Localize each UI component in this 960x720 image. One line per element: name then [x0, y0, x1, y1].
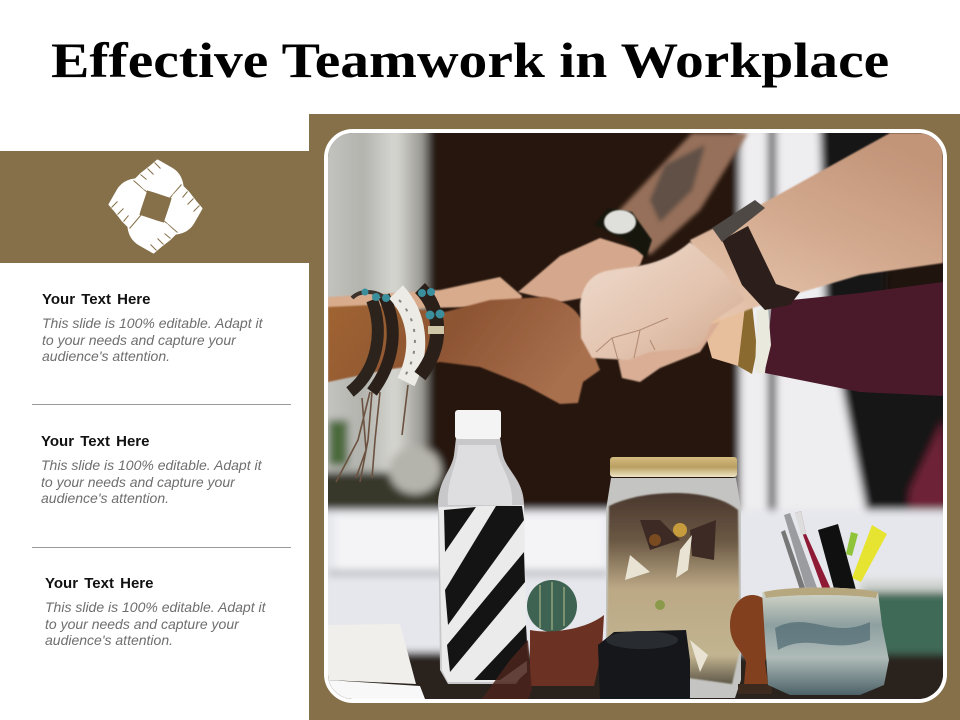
black lens cap: [598, 630, 690, 699]
large forearm: [690, 133, 943, 320]
water bottle: [438, 410, 528, 684]
text block 2: This slide is 100% editable. Adapt it: [41, 457, 262, 473]
text block 3: [45, 575, 266, 648]
panel: right brown background: [309, 114, 960, 720]
main fist: [580, 242, 745, 360]
text block 2: to your needs and capture your: [41, 474, 235, 490]
text block 3: to your needs and capture your: [45, 616, 239, 632]
mixed nut jar: [606, 457, 741, 698]
back hand: [328, 277, 522, 310]
tattooed arm and watch: [518, 133, 748, 302]
text block 1: [42, 291, 263, 364]
maroon sleeve: [765, 282, 943, 396]
dark hand and arm: [328, 297, 600, 404]
panel: left brown icon band: [0, 151, 309, 263]
text block 1: Your Text Here: [42, 291, 150, 308]
text block 2: Your Text Here: [41, 433, 149, 450]
wooden stamp: [730, 595, 775, 694]
leather watch: [712, 200, 800, 310]
text block 3: This slide is 100% editable. Adapt it: [45, 599, 266, 615]
photo frame: [326, 131, 945, 701]
text block 3: audience's attention.: [45, 632, 173, 648]
beaded bracelets: [336, 288, 444, 482]
blurred background: [320, 125, 960, 707]
text block 1: audience's attention.: [42, 348, 170, 364]
text block 1: This slide is 100% editable. Adapt it: [42, 315, 262, 331]
title: Effective Teamwork in Workplace: [51, 32, 889, 88]
ceramic cup: [762, 588, 889, 695]
text block 3: Your Text Here: [45, 575, 153, 592]
text block 1: to your needs and capture your: [42, 332, 236, 348]
text block 2: audience's attention.: [41, 490, 169, 506]
lower fist: [618, 322, 720, 382]
photo: team fist bump over desk: [324, 129, 947, 703]
paper sheet foreground: [328, 624, 532, 699]
wrist with gold bracelet: [707, 307, 771, 374]
cactus in pot: [527, 580, 604, 686]
text block 2: [41, 433, 262, 506]
pens and markers: [781, 511, 887, 596]
